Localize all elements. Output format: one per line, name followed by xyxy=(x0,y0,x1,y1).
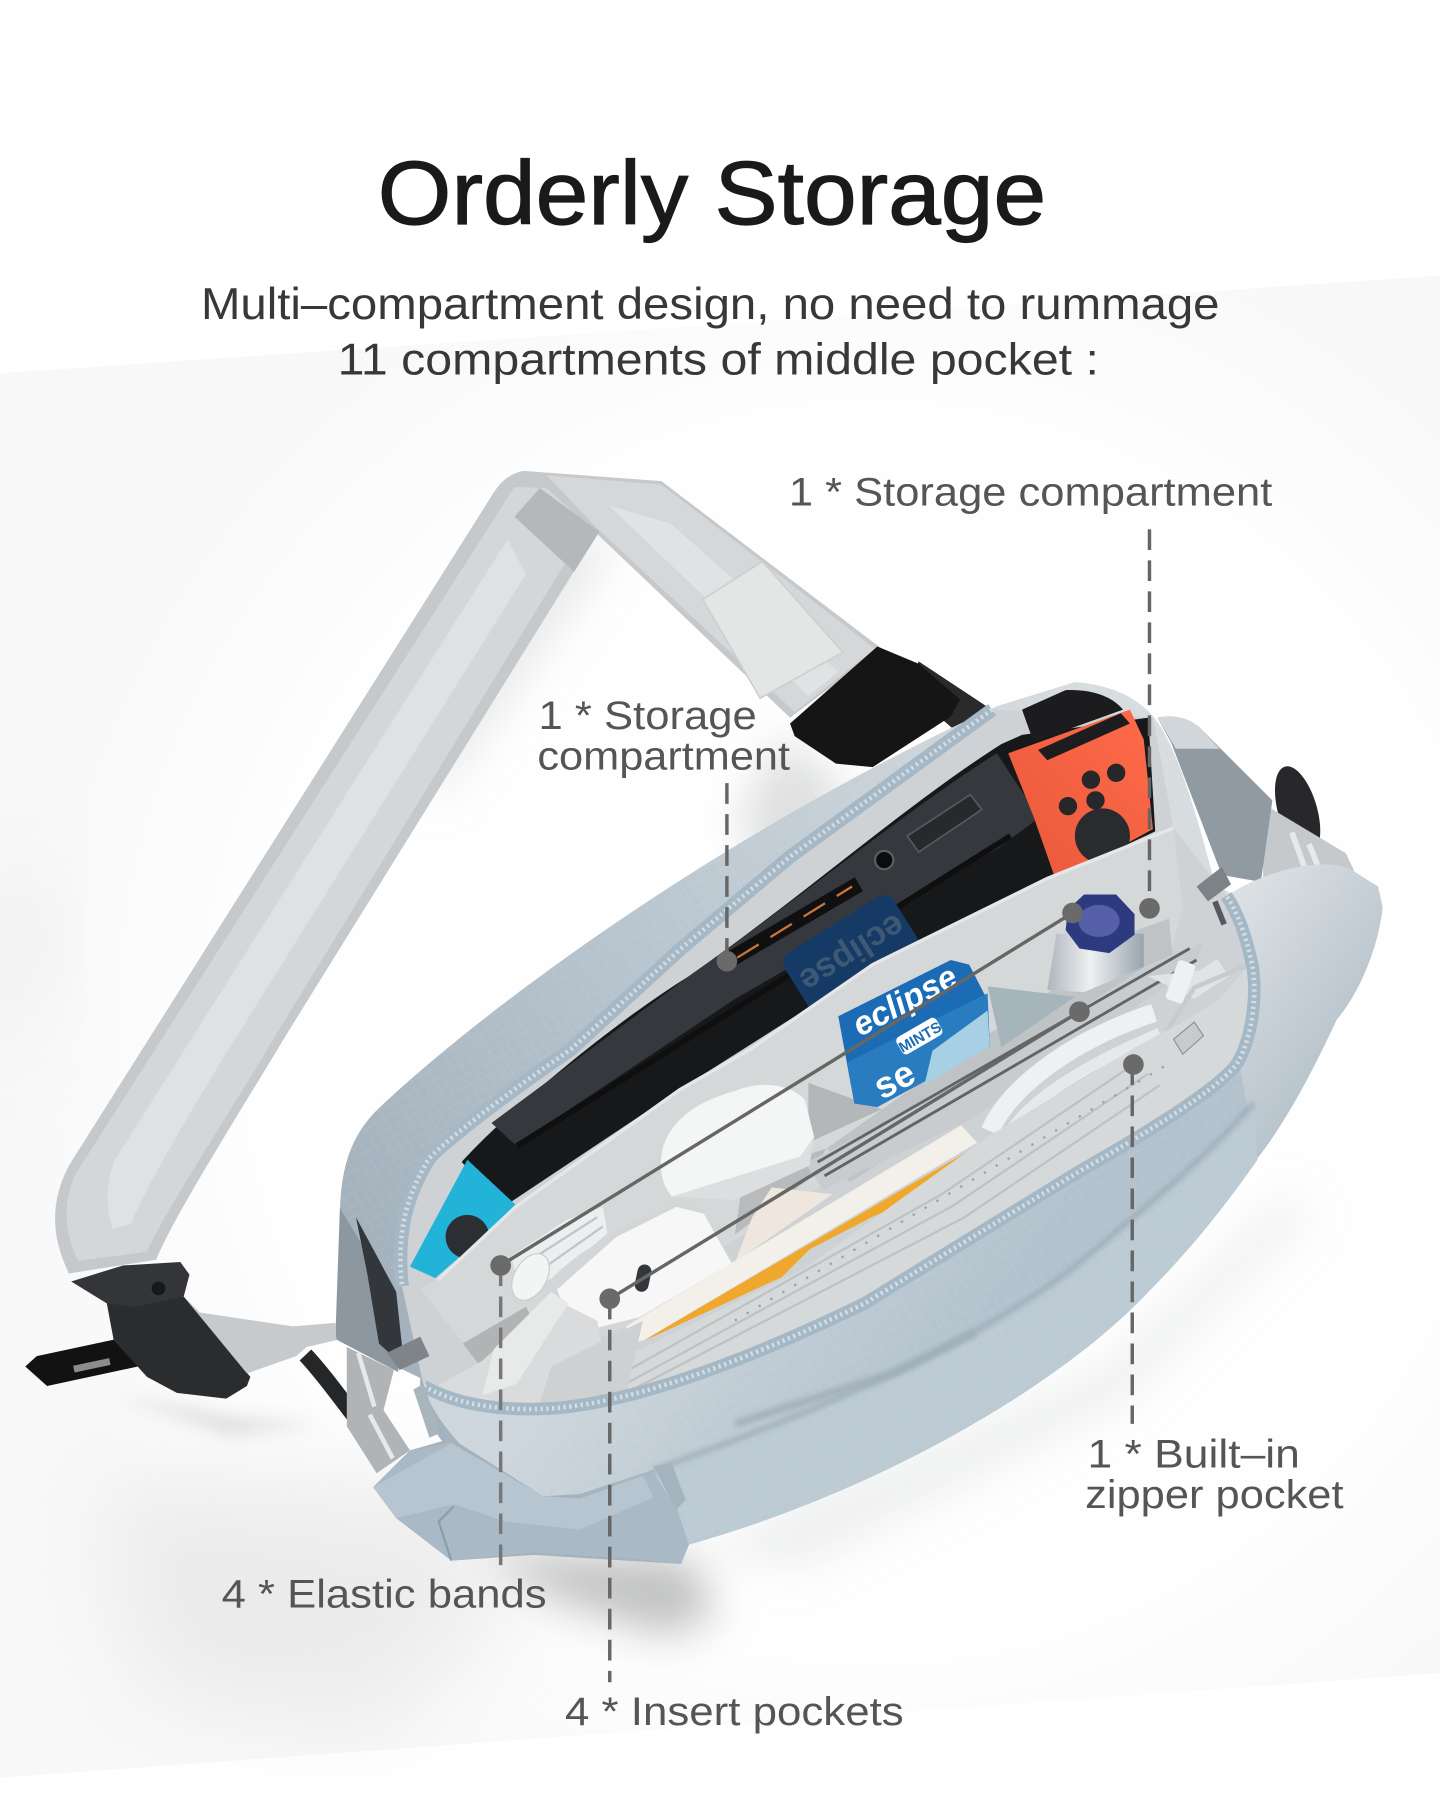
lower bag body xyxy=(373,864,1383,1564)
white cloth xyxy=(735,1187,833,1263)
left side flap xyxy=(335,1208,404,1372)
label: middle storage compartment: compartment xyxy=(537,733,790,778)
strap end tab xyxy=(25,1336,154,1386)
callout: upper storage compartment line xyxy=(1139,529,1160,919)
mints box: MINTS xyxy=(896,1019,945,1057)
screen print xyxy=(779,891,925,1019)
zipper pulls xyxy=(387,867,1231,1438)
cable bundle xyxy=(990,942,1315,1131)
callout: middle storage compartment line xyxy=(717,783,737,971)
game console xyxy=(462,718,1155,1206)
lower webbing xyxy=(347,1347,410,1473)
bag interior base xyxy=(400,710,1254,1409)
notebook xyxy=(626,1125,977,1344)
label: insert pockets: 4 * Insert pockets xyxy=(565,1689,904,1734)
vents xyxy=(729,884,859,960)
shoulder strap xyxy=(55,471,882,1273)
label: elastic bands: 4 * Elastic bands xyxy=(222,1572,547,1617)
mints box: se xyxy=(866,1052,922,1107)
right webbing and ring xyxy=(1263,761,1355,924)
bottom fold xyxy=(373,1442,689,1564)
earbud case xyxy=(661,1085,814,1200)
subtitle line two: 11 compartments of middle pocket : xyxy=(338,334,1099,384)
top buckle xyxy=(790,647,990,767)
label: middle storage compartment xyxy=(537,693,790,778)
label: middle storage compartment: 1 * Storage xyxy=(539,693,757,738)
subtitle line one: Multi–compartment design, no need to rummage xyxy=(201,279,1220,329)
divider panel xyxy=(420,828,1183,1346)
red joy-con xyxy=(1008,690,1153,882)
strap keeper loop xyxy=(703,562,843,698)
white charger xyxy=(540,1203,735,1349)
label: built-in zipper pocket xyxy=(1085,1432,1344,1517)
storage cells xyxy=(463,986,1075,1384)
folded strap xyxy=(184,1296,336,1373)
cable coil xyxy=(504,1207,607,1307)
mints box xyxy=(838,958,990,1107)
bag illustration xyxy=(25,471,1383,1564)
blue joy-con xyxy=(410,1160,518,1278)
left buckle assembly xyxy=(25,1262,410,1473)
lower zipper xyxy=(424,896,1254,1409)
label: top storage compartment: 1 * Storage compartment xyxy=(789,469,1272,514)
callout lines xyxy=(490,529,1160,1682)
stitched tag xyxy=(653,1463,686,1510)
mints box: eclipse xyxy=(846,958,964,1044)
water bottle xyxy=(1047,895,1144,992)
callout: elastic bands line xyxy=(490,903,1083,1573)
label: built-in zipper pocket: 1 * Built–in xyxy=(1087,1432,1300,1477)
label: built-in zipper pocket: zipper pocket xyxy=(1085,1472,1344,1517)
soft shadows xyxy=(0,540,1309,1722)
front pocket inner xyxy=(431,962,1252,1407)
bag silhouette xyxy=(338,682,1383,1564)
callout: insert pockets line xyxy=(599,1001,1090,1682)
lower ring xyxy=(305,1355,370,1435)
upper zipper and lining xyxy=(400,710,992,1286)
callout: built-in zipper pocket line xyxy=(1123,1054,1144,1424)
left buckle xyxy=(71,1262,250,1399)
right end wing xyxy=(1158,716,1272,882)
screen print: eclipse xyxy=(793,906,912,1000)
silver tablet xyxy=(805,942,1203,1190)
title: Orderly Storage xyxy=(378,143,1046,243)
